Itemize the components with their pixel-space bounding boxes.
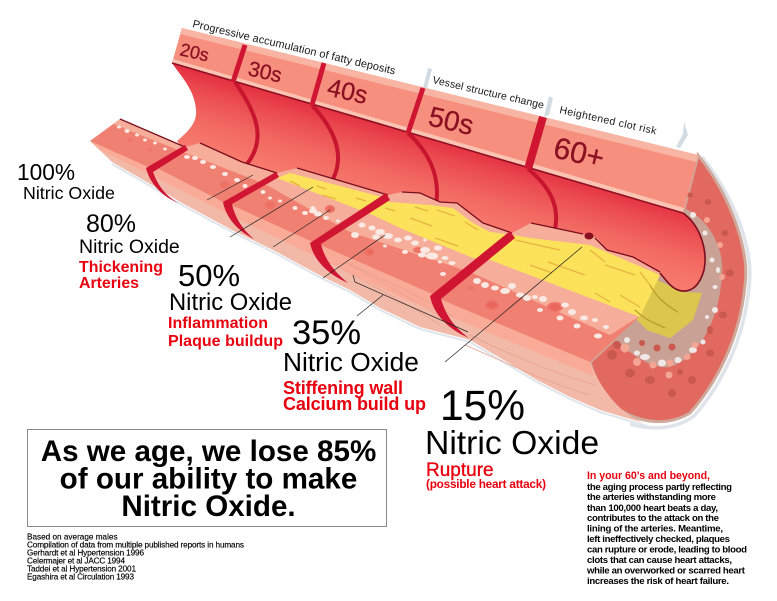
label: 80%: Thickening (79, 259, 163, 276)
label: 35%: 35% (292, 314, 361, 352)
decade label 20s: 20s (178, 39, 211, 65)
side note: 60s and beyond (586, 470, 747, 587)
label: 50%: 50% (178, 258, 240, 293)
label: 80%: 80% (86, 210, 136, 238)
cap plaque streaks (635, 285, 678, 328)
label: 15% (425, 383, 599, 491)
upper vessel wall band (172, 28, 698, 213)
outer tissue striations (340, 262, 595, 395)
salmon muscle layer (90, 119, 660, 362)
label: 35% (283, 314, 426, 414)
decade label 30s: 30s (246, 57, 284, 87)
label: 80%: Nitric Oxide (79, 236, 180, 258)
references: Compilation of data from multiple published reports in humans (27, 540, 244, 550)
label: 80%: Arteries (79, 275, 139, 292)
references (27, 532, 244, 582)
end cap deposits (607, 192, 734, 397)
side note: 60s and beyond: left ineffectively checked, plaques (587, 534, 730, 545)
lumen end outline (660, 213, 705, 291)
headline box: of our ability to make (60, 462, 357, 496)
headline box: Nitric Oxide. (121, 490, 296, 523)
calcium and lipid deposits (128, 138, 563, 312)
side note: 60s and beyond: lining of the arteries. Meantime, (587, 524, 723, 534)
references: Based on average males (27, 532, 118, 542)
label: 100% (17, 159, 115, 203)
references: Gerhardt et al Hypertension 1996 (27, 548, 144, 558)
label: 100%: Nitric Oxide (23, 183, 115, 203)
headline box (28, 430, 386, 526)
decade label 40s: 40s (325, 74, 370, 110)
decade label 50s: 50s (426, 101, 477, 141)
side note: 60s and beyond: In your 60’s and beyond, (587, 470, 710, 482)
outer shadow (112, 164, 650, 427)
pale strip along lower wall (90, 141, 594, 376)
label: 35%: Stiffening wall (283, 378, 403, 398)
tab label: fatty deposits: Progressive accumulation of fatty deposits (191, 18, 397, 78)
tab label: vessel structure: Vessel structure change (431, 74, 545, 112)
tab label: clot risk: Heightened clot risk (558, 104, 658, 138)
decade label 60+: 60+ (550, 132, 607, 175)
side note: 60s and beyond: while an overworked or scarred heart (586, 566, 746, 576)
plaque streaks (290, 181, 650, 307)
side note: 60s and beyond: the aging process partly reflecting (587, 482, 732, 493)
vessel end cap (590, 155, 750, 428)
label: 50%: Inflammation (168, 315, 268, 332)
yellow fatty plaque (277, 173, 660, 317)
tan inner ring (613, 208, 722, 367)
label: 15%: Rupture (426, 460, 494, 481)
label: 100%: 100% (17, 159, 75, 185)
vessel interior (lumen) (172, 63, 705, 291)
artery illustration (90, 18, 750, 428)
label: 80% (79, 210, 180, 292)
cut-away lower vessel wall (90, 119, 678, 427)
references: Celermajer et al JACC 1994 (27, 556, 125, 566)
tab shading (423, 68, 688, 148)
label: 15%: (possible heart attack) (426, 477, 546, 491)
side note: 60s and beyond: contributes to the attack on the (587, 513, 719, 524)
rupture line along lumen edge (120, 119, 660, 272)
interior decade ring lines (235, 82, 556, 229)
label: 50%: Nitric Oxide (169, 289, 292, 316)
references: Taddei et al Hypertension 2001 (27, 564, 136, 574)
side note: 60s and beyond: clots that can cause heart attacks, (587, 555, 732, 566)
outer tissue face (90, 141, 650, 425)
headline box: As we age, we lose 85% (41, 435, 376, 468)
label: 50% (168, 258, 292, 350)
label: 35%: Calcium build up (283, 394, 426, 414)
references: Egashira et al Circulation 1993 (27, 572, 134, 582)
label: 15%: 15% (440, 383, 525, 430)
side note: 60s and beyond: the arteries withstanding more (587, 492, 716, 503)
label: 15%: Nitric Oxide (425, 424, 599, 462)
yellow cap plaque (632, 280, 702, 338)
side note: 60s and beyond: can rupture or erode, leading to blood (587, 544, 747, 556)
pointer lines (207, 175, 582, 362)
label: 35%: Nitric Oxide (283, 347, 419, 377)
decade cut lines (146, 145, 515, 338)
side note: 60s and beyond: increases the risk of heart failure. (587, 576, 729, 587)
label: 50%: Plaque buildup (168, 333, 283, 350)
pale intima layer (113, 119, 660, 335)
side note: 60s and beyond: than 100,000 heart beats a day, (587, 503, 718, 514)
rupture clot (584, 232, 594, 240)
